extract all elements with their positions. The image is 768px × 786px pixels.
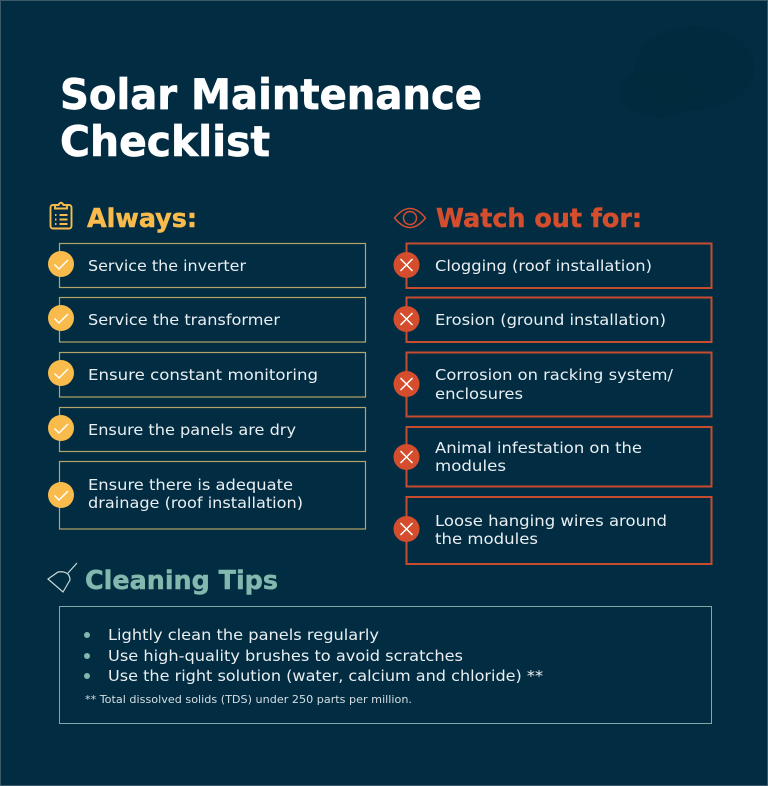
item: ensure the panels are dry — [48, 408, 366, 452]
footnote: ** Total dissolved solids (TDS) under 250 parts per million. — [85, 694, 412, 706]
item: animal infestation: modules — [435, 457, 506, 475]
item: ensure constant monitoring — [48, 352, 366, 397]
panel: cleaning tips — [48, 563, 712, 724]
title — [60, 70, 482, 166]
item: corrosion — [394, 352, 712, 416]
tips list — [84, 626, 543, 685]
item: erosion — [394, 298, 712, 342]
item: service the inverter — [48, 244, 366, 288]
item: corrosion: Corrosion on racking system/ — [435, 366, 674, 384]
item: ensure the panels are dry: Ensure the panels are dry — [88, 421, 296, 439]
item: ensure adequate drainage — [48, 462, 366, 529]
icon: broom — [48, 563, 77, 592]
item: animal infestation — [394, 427, 712, 486]
item: clogging — [394, 244, 712, 288]
title: Solar Maintenance — [60, 70, 482, 119]
tips box — [60, 606, 712, 724]
item: ensure adequate drainage: Ensure there is adequate — [88, 476, 293, 494]
title: Checklist — [60, 117, 270, 166]
icon: clipboard — [50, 203, 72, 228]
item: erosion: Erosion (ground installation) — [435, 311, 666, 329]
item: ensure constant monitoring: Ensure constant monitoring — [88, 366, 318, 384]
item: animal infestation: Animal infestation on the — [435, 439, 642, 457]
icon: eye — [394, 208, 426, 228]
item: loose hanging wires: Loose hanging wires around — [435, 512, 667, 530]
panel: watch out for — [394, 204, 712, 564]
item: service the transformer — [48, 298, 366, 342]
heading: always: Always: — [87, 204, 197, 234]
tips list: Use the right solution (water, calcium and chloride) ** — [108, 667, 543, 685]
item: clogging: Clogging (roof installation) — [435, 257, 652, 275]
item: loose hanging wires: the modules — [435, 530, 538, 548]
item: loose hanging wires — [394, 497, 712, 564]
tips list: Use high-quality brushes to avoid scratches — [108, 647, 463, 665]
item: ensure adequate drainage: drainage (roof installation) — [88, 494, 303, 512]
heading: cleaning tips: Cleaning Tips — [85, 566, 278, 596]
item: service the inverter: Service the inverter — [88, 257, 247, 275]
item: service the transformer: Service the transformer — [88, 311, 281, 329]
heading: watch out for: Watch out for: — [436, 204, 642, 234]
panel: always — [48, 203, 366, 529]
tips list: Lightly clean the panels regularly — [108, 626, 379, 644]
item: corrosion: enclosures — [435, 385, 523, 403]
